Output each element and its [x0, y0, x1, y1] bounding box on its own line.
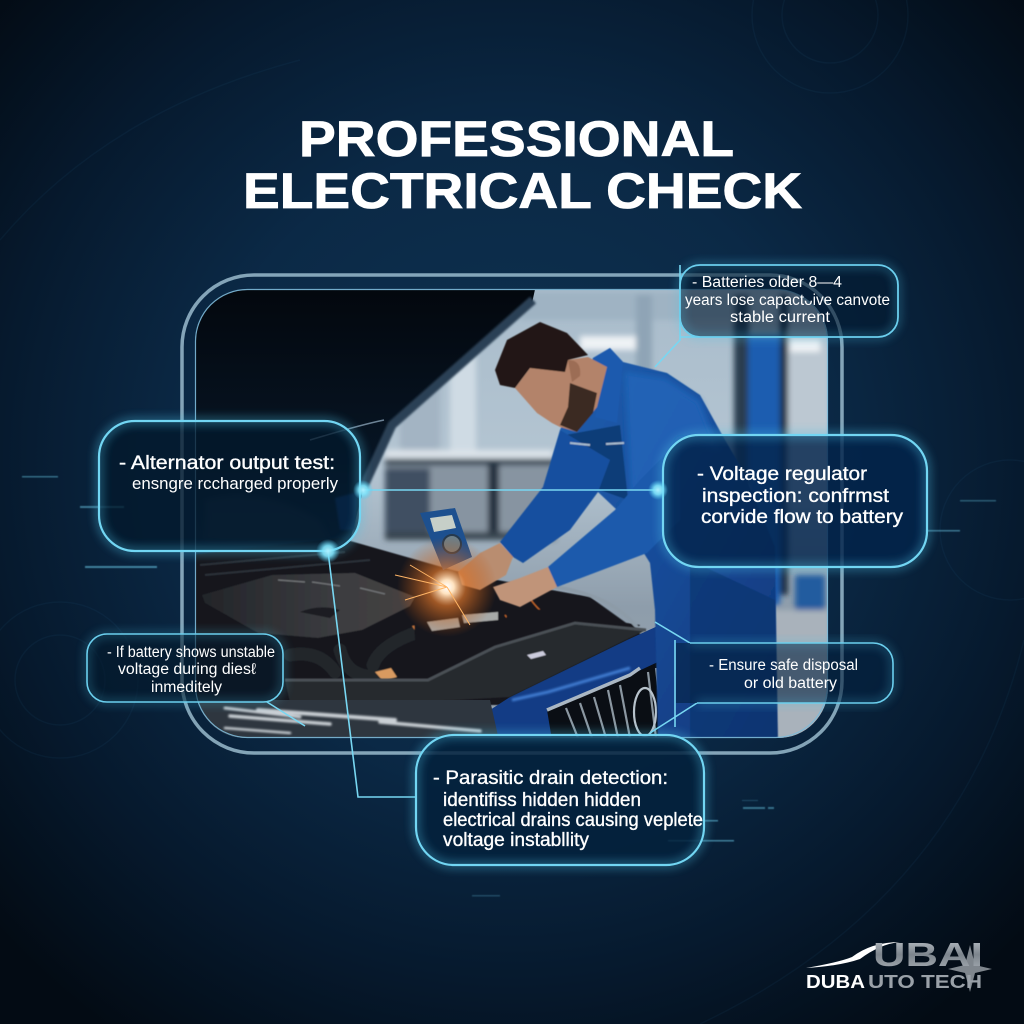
outer and inner frame: [182, 275, 842, 753]
icon: car roofline swoosh: [806, 942, 900, 968]
logo: Dubai Auto Tech: UTO TECH: [868, 972, 982, 992]
neck and face: [515, 357, 607, 432]
callout: safe disposal: - Ensure safe disposal: [709, 657, 858, 674]
callout: unstable battery voltage: [87, 634, 283, 702]
open car hood: [190, 285, 536, 575]
sparks: [395, 537, 497, 637]
hoses: [290, 632, 418, 676]
callout: safe disposal: [676, 643, 893, 703]
title: PROFESSIONAL: [299, 111, 734, 167]
logo: Dubai Auto Tech: UBAI: [873, 936, 983, 973]
ear: [568, 360, 580, 382]
callout: voltage regulator inspection: - Voltage regulator: [697, 464, 868, 485]
connector node dots: [316, 480, 668, 563]
headlight: [198, 700, 498, 738]
logo: Dubai Auto Tech: [806, 936, 992, 992]
callout: unstable battery voltage: inmeditely: [151, 679, 222, 696]
near arm: [548, 491, 662, 588]
callout: safe disposal: or old battery: [744, 675, 837, 692]
callout: batteries: years lose capactᴗive canvote: [685, 292, 890, 309]
callout: alternator output test: [99, 421, 360, 551]
collar: [593, 348, 623, 423]
chest shade: [565, 425, 628, 500]
callout: parasitic drain detection: electrical drains causing veplete: [443, 810, 703, 831]
shoulder highlight: [625, 372, 720, 495]
title: ELECTRICAL CHECK: [243, 163, 802, 219]
mechanic in blue coveralls: [458, 322, 778, 745]
beard: [560, 383, 597, 432]
photo: mechanic testing car electrics: [190, 285, 835, 745]
hands: [458, 543, 513, 590]
callout: batteries: - Batteries older 8—4: [692, 274, 842, 291]
callout: alternator output test: ensngre rccharged properly: [132, 474, 338, 493]
coveralls body: [560, 348, 778, 745]
icon: four point star: [948, 945, 992, 992]
engine cover: [202, 573, 415, 638]
callout: batteries: [680, 265, 898, 337]
battery: [414, 623, 426, 640]
connector lines: [267, 265, 700, 797]
far arm: [500, 430, 610, 563]
title: [243, 111, 802, 219]
callout: voltage regulator inspection: [663, 435, 927, 567]
glow accent dashes: [22, 476, 996, 896]
callout: voltage regulator inspection: inspection: confrmst: [702, 486, 890, 507]
workshop background: [190, 285, 835, 745]
callout: voltage regulator inspection: corvide flow to battery: [701, 507, 904, 528]
hair: [495, 322, 588, 388]
multimeter: [420, 508, 472, 570]
callout: parasitic drain detection: [416, 735, 704, 865]
car body blue fender: [492, 627, 657, 737]
engine bay: [190, 538, 650, 705]
callout: batteries: stable current: [730, 309, 831, 326]
callout: parasitic drain detection: - Parasitic drain detection:: [433, 768, 668, 789]
callout: parasitic drain detection: identifiss hidden hidden: [443, 790, 641, 811]
callout: alternator output test: - Alternator output test:: [119, 453, 335, 474]
callout: unstable battery voltage: - If battery shows unstable: [107, 644, 275, 661]
callout: unstable battery voltage: voltage during dies⁠ℓ: [118, 661, 256, 678]
logo: Dubai Auto Tech: DUBA: [806, 972, 865, 992]
grille: [546, 662, 658, 737]
front lip of engine bay: [285, 623, 646, 703]
callout: parasitic drain detection: voltage instabllity: [443, 830, 589, 851]
